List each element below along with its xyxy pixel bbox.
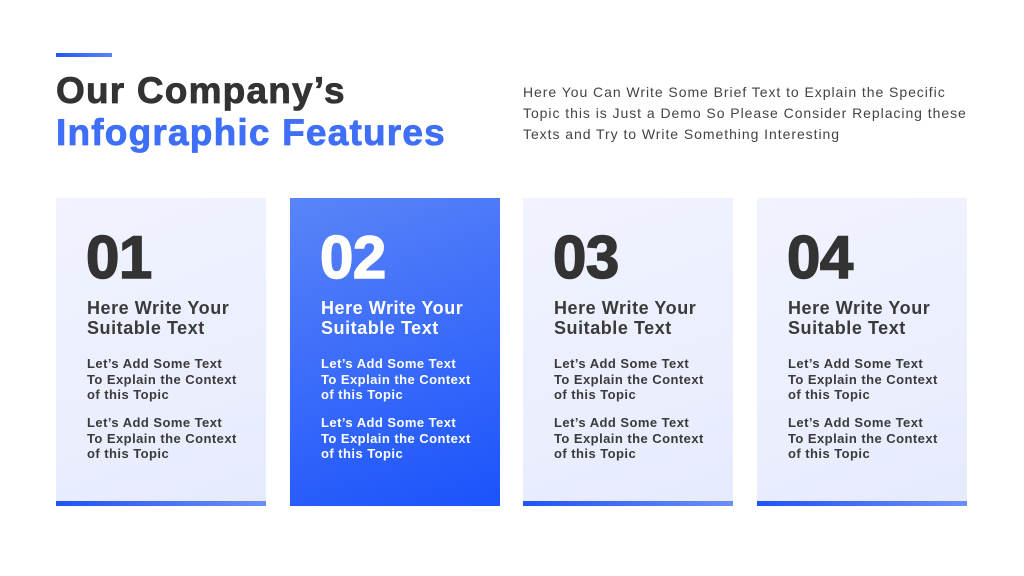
card 02: Here Write Your	[321, 298, 463, 318]
card 04: of this Topic	[788, 387, 870, 402]
intro paragraph: Here You Can Write Some Brief Text to Explain the Specific	[523, 84, 946, 100]
card 02	[290, 198, 500, 506]
card 02: Let’s Add Some Text	[321, 415, 456, 430]
card 01: Let’s Add Some Text	[87, 356, 222, 371]
title: Infographic Features	[56, 112, 446, 153]
card 04	[757, 198, 967, 506]
card 02: 02	[320, 224, 386, 291]
card 03: Suitable Text	[554, 318, 672, 338]
card 02: To Explain the Context	[321, 372, 471, 387]
card 04: 04	[787, 224, 853, 291]
intro paragraph: Topic this is Just a Demo So Please Consider Replacing these	[523, 105, 967, 121]
card 01	[56, 198, 266, 506]
card 04: Suitable Text	[788, 318, 906, 338]
card 04: of this Topic	[788, 446, 870, 461]
card 01: To Explain the Context	[87, 431, 237, 446]
card 04: Let’s Add Some Text	[788, 415, 923, 430]
card 02: of this Topic	[321, 446, 403, 461]
card 04: To Explain the Context	[788, 431, 938, 446]
card 04: Here Write Your	[788, 298, 930, 318]
card 03: 03	[553, 224, 619, 291]
card 03: To Explain the Context	[554, 372, 704, 387]
card 01: of this Topic	[87, 446, 169, 461]
title: Our Company’s	[56, 70, 346, 111]
card 01: of this Topic	[87, 387, 169, 402]
card 03	[523, 198, 733, 506]
card 04: Let’s Add Some Text	[788, 356, 923, 371]
card 01: 01	[86, 224, 152, 291]
card 02: Let’s Add Some Text	[321, 356, 456, 371]
card 03: Let’s Add Some Text	[554, 356, 689, 371]
card 02: of this Topic	[321, 387, 403, 402]
card 01: To Explain the Context	[87, 372, 237, 387]
card 01: Here Write Your	[87, 298, 229, 318]
card 01: Let’s Add Some Text	[87, 415, 222, 430]
card 04: To Explain the Context	[788, 372, 938, 387]
card 03: Let’s Add Some Text	[554, 415, 689, 430]
intro paragraph	[523, 84, 967, 142]
card 03: of this Topic	[554, 446, 636, 461]
title	[56, 70, 446, 153]
card 02: Suitable Text	[321, 318, 439, 338]
card 02: To Explain the Context	[321, 431, 471, 446]
intro paragraph: Texts and Try to Write Something Interesting	[523, 126, 840, 142]
card 03: To Explain the Context	[554, 431, 704, 446]
accent line	[56, 53, 112, 57]
card 03: of this Topic	[554, 387, 636, 402]
card 01: Suitable Text	[87, 318, 205, 338]
card 03: Here Write Your	[554, 298, 696, 318]
